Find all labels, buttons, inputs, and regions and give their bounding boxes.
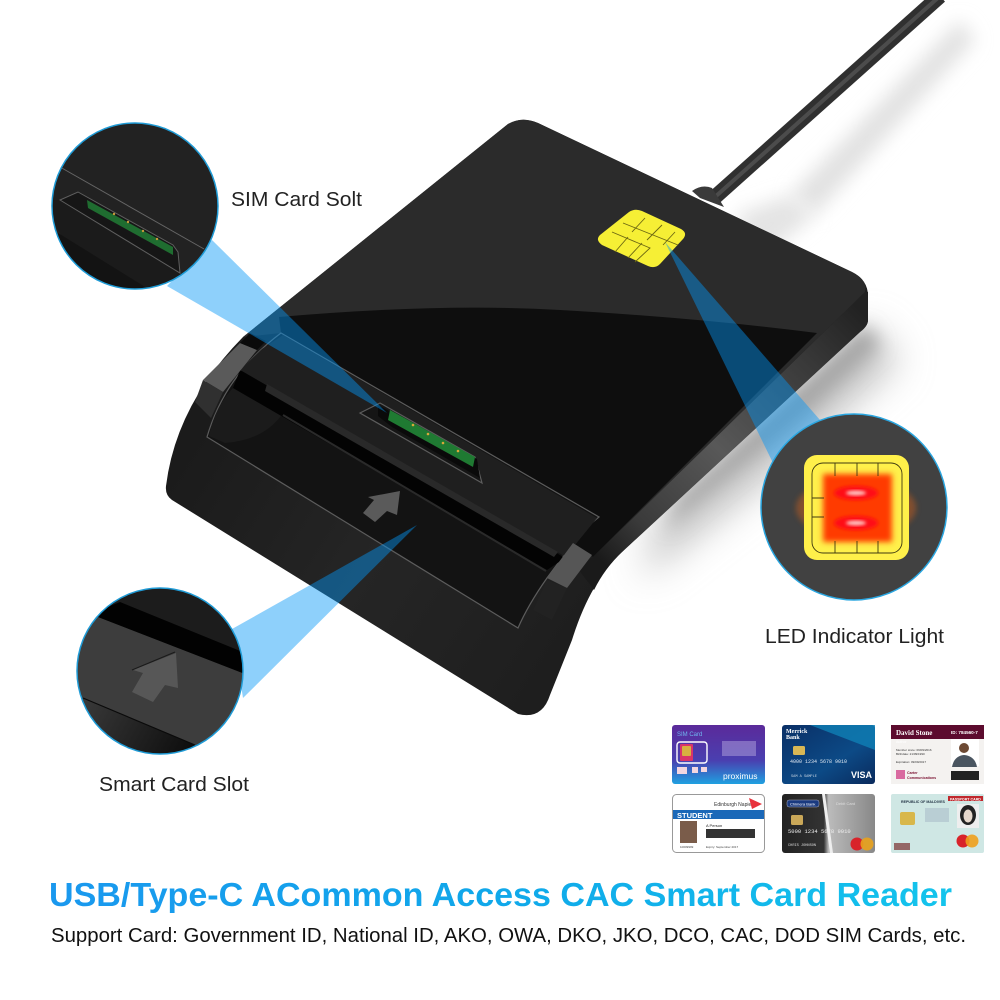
beam: sim card [167, 240, 387, 413]
card: staff id: ID: 784560-7 [951, 730, 978, 735]
card: staff id: David Stone [896, 729, 932, 737]
card: merrick bank: Bank [786, 735, 800, 741]
beam: led [665, 242, 820, 463]
title: USB/Type-C ACommon Access CAC Smart Card Reader [49, 876, 952, 913]
strip above slot [240, 335, 597, 557]
smart chip contacts [598, 210, 685, 267]
right side wall [575, 292, 868, 590]
label: led indicator: LED Indicator Light [765, 625, 944, 648]
label: smart card slot: Smart Card Slot [99, 773, 249, 796]
card: student: A Person [706, 823, 722, 828]
card: merrick bank [782, 725, 875, 784]
card: staff id: Member since: 09/09/2016 [896, 748, 932, 752]
card: merrick bank: Merrick [786, 729, 808, 735]
card: passport card: REPUBLIC OF MALDIVES [901, 800, 946, 804]
card: merrick bank: VISA [851, 770, 873, 780]
circle: sim card zoom [51, 122, 219, 290]
reader body silhouette [166, 120, 868, 715]
card reader device [166, 120, 868, 715]
card: staff id: Author [896, 740, 907, 744]
card: sim card: proximus [723, 771, 757, 781]
glossy black reflection [279, 308, 817, 557]
card: debit card [782, 794, 875, 853]
card insertion slot [233, 370, 565, 570]
top face [243, 120, 865, 557]
card: staff id: Communications [907, 776, 936, 780]
card: staff id: Expiration: 09/09/2017 [896, 760, 926, 764]
card: debit card: CHRIS JOHNSON [788, 844, 816, 848]
left end cap [195, 333, 266, 418]
card: merrick bank: SAM A SAMPLE [791, 775, 817, 779]
card: student: 10009999 [680, 845, 694, 849]
circle: smart card slot zoom [76, 587, 244, 755]
cable strain relief [692, 187, 724, 207]
right end cap [533, 543, 592, 620]
subtitle: Support Card: Government ID, National ID, AKO, OWA, DKO, JKO, DCO, CAC, DOD SIM Cards, etc. [51, 925, 966, 947]
device shadow [640, 20, 975, 580]
card: passport card [891, 794, 984, 853]
card: debit card: Chimera Bank [790, 802, 815, 806]
card: student: Expiry: September 2017 [706, 845, 739, 849]
circle: led zoom [761, 414, 947, 600]
card: merrick bank: 4000 1234 5678 9010 [790, 759, 847, 765]
card: staff id [891, 725, 984, 784]
card: student [672, 794, 764, 852]
slot panel [207, 333, 599, 628]
usb cable [692, 0, 940, 207]
card: sim card: SIM Card [677, 732, 702, 738]
card: student: STUDENT [677, 811, 713, 820]
panel reflection [209, 385, 283, 443]
sim card slot [360, 403, 482, 483]
card: staff id: Birthdate: 21/09/1990 [896, 752, 925, 756]
label: sim card slot: SIM Card Solt [231, 188, 362, 211]
beam: smart card [232, 525, 417, 698]
card: sim card [672, 725, 765, 784]
insertion arrow [363, 491, 400, 522]
card: staff id: Carter [907, 771, 918, 775]
card: debit card: 5000 1234 5678 9010 [788, 828, 851, 835]
card: debit card: Debit Card [836, 801, 855, 806]
card: student: Edinburgh Napier [714, 802, 753, 808]
card: passport card: PASSPORT CARD [950, 798, 981, 802]
